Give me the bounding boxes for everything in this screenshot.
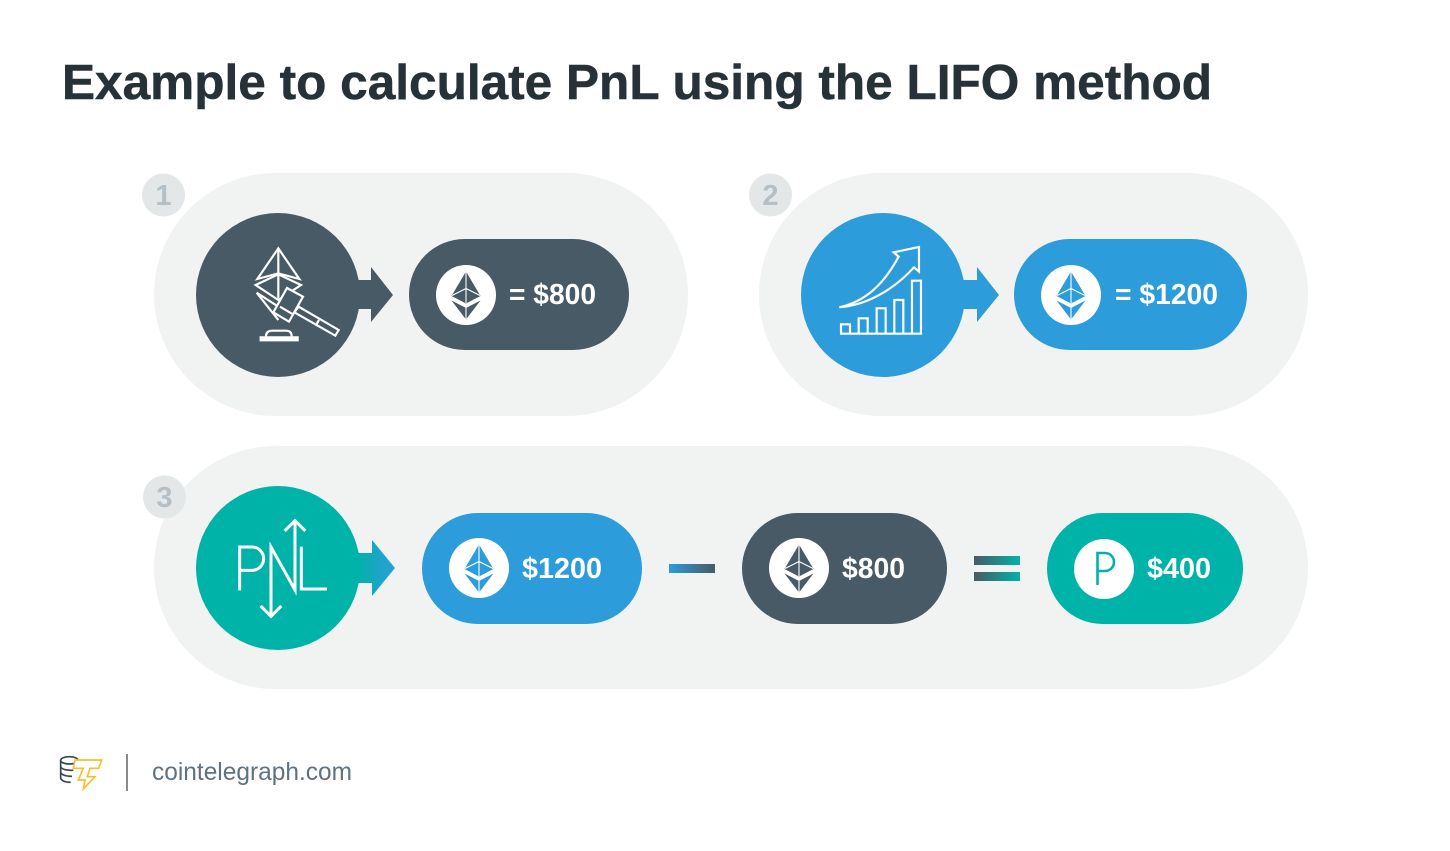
- panel: step 3: [143, 446, 1308, 689]
- icon: ether coin: [449, 538, 509, 598]
- step number 1: 1: [155, 180, 172, 212]
- value: = $800: [509, 279, 596, 311]
- arrow: step 3: [355, 540, 395, 596]
- step number 3: [143, 476, 186, 518]
- step number 2: 2: [762, 180, 779, 212]
- arrow: step 1: [350, 267, 393, 322]
- icon: ether coin: [769, 538, 829, 598]
- icon: P coin: [1074, 539, 1134, 599]
- panel background: [759, 173, 1308, 416]
- step number 2: [749, 174, 792, 216]
- icon: PNL with arrows: [196, 486, 360, 650]
- panel: step 2: [749, 173, 1308, 416]
- footer: Cointelegraph logo: [61, 754, 352, 791]
- value: $400: [1147, 553, 1211, 585]
- step number 3: 3: [156, 482, 173, 514]
- icon: auction gavel on ether: [196, 213, 360, 377]
- panel background: [154, 173, 688, 416]
- step number 1: [142, 174, 185, 216]
- panel background: [154, 446, 1308, 689]
- icon: ether coin: [1041, 265, 1101, 325]
- value: = $1200: [1115, 279, 1218, 311]
- pill: $1200: [422, 513, 642, 624]
- pill: ether equals $1200: [1014, 239, 1247, 350]
- icon: ether coin: [436, 265, 496, 325]
- icon: coins and lightning: [61, 757, 102, 789]
- title: Example to calculate PnL using the LIFO method: [62, 56, 1212, 110]
- equals sign: [974, 556, 1020, 581]
- pill: ether equals $800: [409, 239, 629, 350]
- website text: cointelegraph.com: [152, 758, 352, 786]
- pill: $800: [742, 513, 947, 624]
- minus sign: [669, 564, 715, 573]
- value: $800: [842, 553, 905, 585]
- value: $1200: [522, 553, 602, 585]
- divider: [126, 754, 128, 791]
- panel: step 1: [142, 173, 688, 416]
- icon: rising bar chart: [801, 213, 965, 377]
- pill: $400 profit: [1047, 513, 1243, 624]
- arrow: step 2: [955, 267, 999, 322]
